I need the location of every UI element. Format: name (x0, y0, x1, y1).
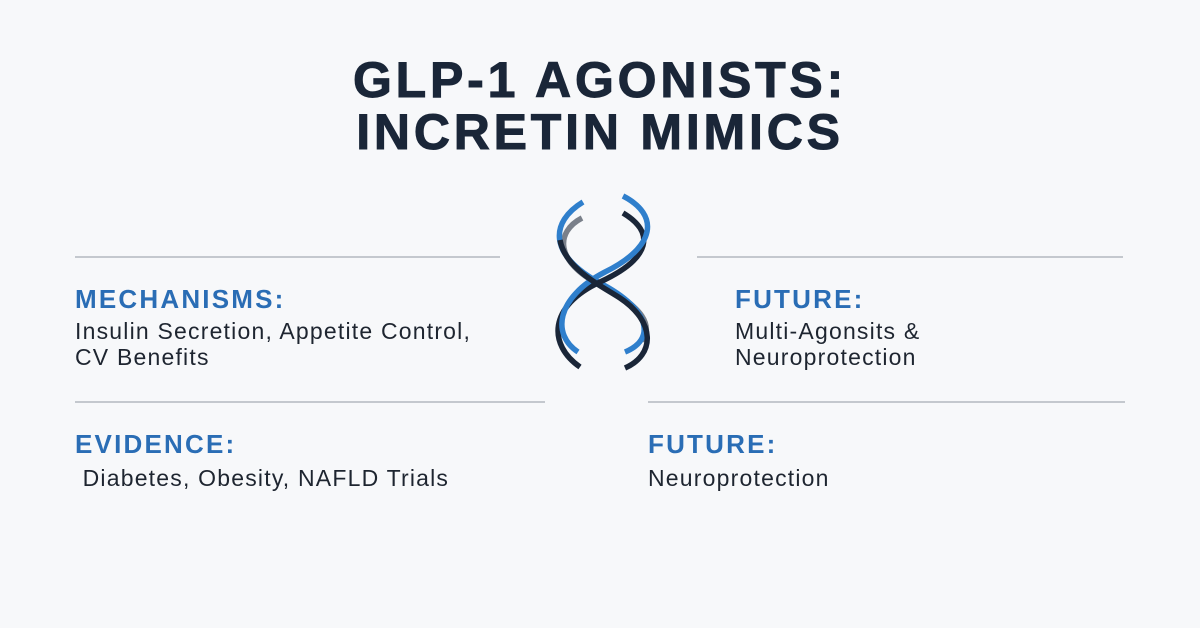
title: GLP-1 AGONISTS: (353, 52, 847, 108)
heading: mechanisms: MECHANISMS: (75, 284, 286, 314)
text: mechanisms: CV Benefits (75, 344, 210, 370)
heading: future 2: FUTURE: (648, 429, 778, 459)
panel: future 2 (648, 429, 830, 491)
text: mechanisms (75, 318, 471, 370)
text: evidence: Diabetes, Obesity, NAFLD Trials (83, 465, 449, 491)
title: INCRETIN MIMICS (356, 104, 844, 160)
panel: evidence (75, 429, 449, 491)
text: future 2: Neuroprotection (648, 465, 830, 491)
text: mechanisms: Insulin Secretion, Appetite Control, (75, 318, 471, 344)
heading: evidence: EVIDENCE: (75, 429, 236, 459)
panel: mechanisms (75, 284, 471, 370)
title (353, 52, 847, 160)
text: future: Multi-Agonsits & (735, 318, 920, 344)
text: future: Neuroprotection (735, 344, 917, 370)
panel: future 1 (735, 284, 920, 370)
heading: future: FUTURE: (735, 284, 864, 314)
text: future (735, 318, 920, 370)
